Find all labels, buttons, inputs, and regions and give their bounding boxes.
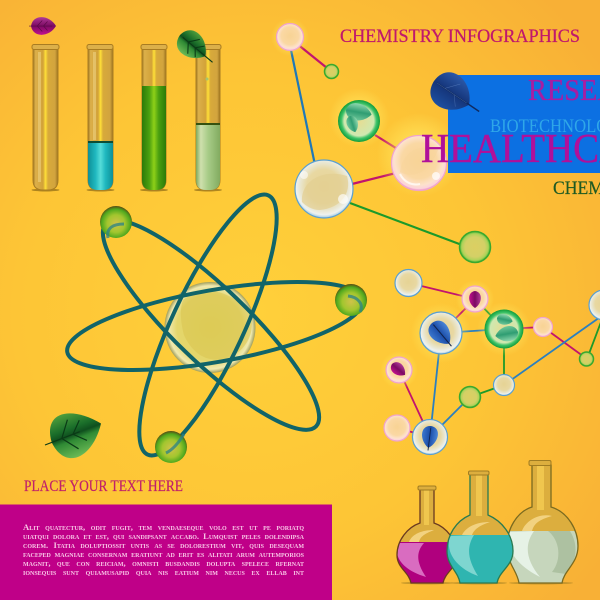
molecule: small pink atom bbox=[271, 18, 309, 56]
heading: place your text here: PLACE YOUR TEXT HERE bbox=[24, 478, 183, 495]
title: CHEMISTRY INFOGRAPHICS bbox=[340, 27, 580, 47]
molecule: green atom with leaf lower bbox=[477, 302, 531, 356]
panel: magenta text box bbox=[0, 504, 332, 600]
molecule: lower bond lines bbox=[397, 283, 600, 437]
test tube: green liquid bbox=[140, 44, 168, 192]
test tube: teal liquid bbox=[86, 44, 114, 192]
molecule: upper bond lines bbox=[291, 43, 462, 245]
icon: purple leaf bbox=[29, 17, 56, 35]
electron: top left bbox=[100, 206, 132, 238]
text block: body paragraph: Alit quatectur, odit fugit, tem vendaeseque volo est ut pe poriatq bbox=[23, 522, 304, 532]
molecule: blue atom at right edge bbox=[589, 290, 600, 320]
molecule: blue atom with blue leaf bottom bbox=[412, 420, 448, 454]
icon: green leaf on tube bbox=[172, 25, 221, 72]
text block: body paragraph: corem. Itatia doluptiossit untis as se dolorestium vit, quis desequam bbox=[23, 540, 304, 550]
icon: large green leaf bbox=[37, 402, 109, 466]
flask: large mint bbox=[505, 460, 581, 585]
molecule: pink atom with purple leaf bbox=[456, 280, 494, 318]
molecule: pink atom bottom bbox=[384, 415, 410, 441]
molecule: small pink atom right bbox=[534, 318, 552, 336]
molecule: small green atom lower bbox=[460, 386, 480, 408]
atom diagram bbox=[61, 180, 369, 470]
molecule: green atom right bbox=[460, 232, 490, 262]
test tube: empty bbox=[32, 44, 60, 192]
icon: dark blue leaf bbox=[424, 66, 489, 127]
molecule: green atom with leaf bbox=[329, 88, 389, 148]
panel: blue banner bbox=[448, 75, 600, 173]
text block: body paragraph: faceped magniae consernam eratiunt ad erit es alitati arum autemporios bbox=[23, 549, 304, 559]
text block: body paragraph: magnit, que con reiciam, omnisti busdandis dolupta spelece rfernat bbox=[23, 558, 304, 568]
test tube: pale green liquid bbox=[194, 44, 222, 192]
text block: body paragraph: uiatqui dolora et est, qui sandipsant accabo. Lumquist peles dolendipsa bbox=[23, 531, 304, 541]
molecule: blue atom with blue leaf bbox=[411, 303, 471, 363]
molecule: large pink atom bbox=[377, 113, 461, 197]
text block: body paragraph bbox=[23, 522, 304, 577]
flask: small magenta bbox=[396, 486, 453, 584]
atom orbits bbox=[61, 180, 369, 470]
molecule: tiny green atom bbox=[324, 64, 338, 78]
atom nucleus bbox=[164, 282, 256, 373]
molecule: lower blue atom top bbox=[395, 270, 422, 296]
molecule: pink atom with purple leaf left bbox=[380, 351, 418, 389]
flask: medium teal bbox=[445, 470, 515, 585]
text block: body paragraph: ionsequis sunt quiamusapid quia nis eatium nim necus ex ellab int bbox=[23, 567, 304, 577]
molecule: tiny green atom right bbox=[580, 352, 594, 366]
molecule: large blue atom bbox=[295, 160, 353, 218]
molecule: small blue atom bbox=[494, 374, 514, 396]
electron: bottom bbox=[155, 431, 187, 463]
electron: right bbox=[335, 284, 367, 316]
